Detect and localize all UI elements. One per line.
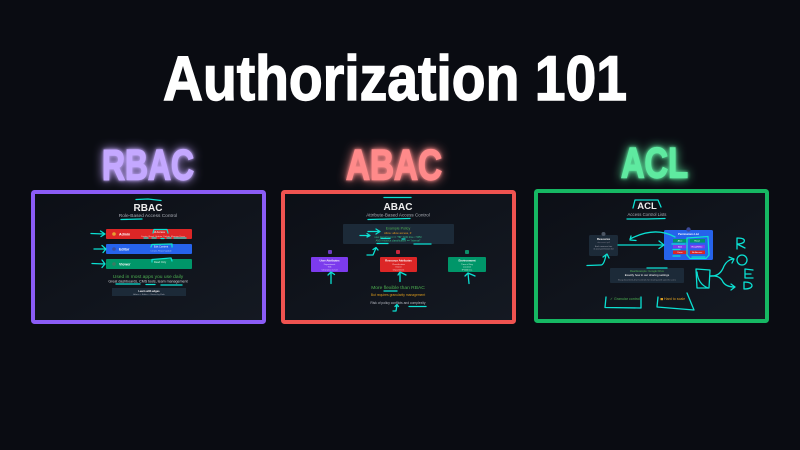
box: resource attributes: Owner	[395, 266, 402, 268]
box: resource attributes: Resource Attributes	[385, 258, 412, 262]
text: examples: Great dashboards, CMS tools, team management	[108, 280, 188, 284]
example policy box: user.department == "HR" AND time < 5PM	[374, 236, 422, 239]
attribute dots	[328, 250, 469, 254]
role bar: admin: Admin	[119, 232, 130, 236]
panel title: RBAC: RBAC	[134, 203, 162, 214]
example policy box: Example Policy	[386, 226, 410, 230]
box: user attributes	[311, 257, 348, 272]
box: user attributes: Clearance Level	[322, 268, 338, 271]
box: user attributes: User Attributes	[319, 258, 340, 262]
resource box: its own permission list	[593, 248, 614, 250]
box: resource attributes: Classification	[392, 263, 406, 266]
resource box	[589, 232, 618, 256]
pro: granular control: ✓ Granular control	[610, 297, 640, 301]
box: environment: Environment	[458, 258, 476, 262]
heading: ACL: ACL	[621, 140, 688, 188]
panel title: ACL: ACL	[637, 201, 657, 212]
example policy box	[343, 224, 454, 244]
text: risk: Risk of policy conflicts and complexity	[370, 301, 426, 305]
permissions list box: Read/Write	[692, 246, 703, 248]
panel: RBAC	[33, 192, 264, 322]
text: usage: Used in most apps you use daily	[113, 274, 184, 280]
box: resource attributes: Department	[393, 268, 405, 271]
box: environment: Time of Day	[461, 264, 474, 266]
example policy box: AND resource.classification == "internal"	[376, 240, 421, 242]
panel subtitle: Access Control Lists	[628, 212, 666, 217]
example policy box: Allow: allow access, if:	[384, 231, 412, 235]
permissions list box: Dave	[677, 252, 683, 254]
hand-drawn annotations	[328, 198, 475, 311]
resource box: Each resource has	[595, 245, 612, 248]
role bar: admin	[106, 229, 192, 239]
box: environment	[448, 257, 486, 272]
heading: RBAC: RBAC	[102, 142, 194, 190]
role bar: editor: Editor	[119, 248, 130, 252]
role bar: editor	[106, 244, 192, 254]
text: flexibility: More flexible than RBAC	[371, 285, 425, 291]
permissions list box: Alice	[678, 240, 683, 243]
box: user attributes: Department	[324, 263, 336, 266]
permissions list box	[664, 227, 713, 260]
callout: Admin > Editor > Viewer by Role	[133, 293, 166, 296]
hand-drawn letters: R O E D	[737, 238, 753, 289]
role bar: admin: All Access	[153, 230, 166, 234]
example callout box: Easy document-level controls for sharing with specific users	[618, 278, 677, 282]
title: Authorization 101	[163, 44, 627, 114]
role bar: viewer: Read Only	[154, 260, 167, 264]
role bar: viewer	[106, 259, 192, 269]
role bar: editor: Create, Read, Update	[150, 250, 172, 252]
panel: ACL	[536, 191, 767, 321]
panel subtitle: Role-Based Access Control	[119, 213, 177, 219]
text: granularity: But requires granularity management	[371, 293, 425, 297]
resource box: document.pdf	[597, 241, 610, 244]
permissions list box: Read	[694, 241, 700, 243]
con: hard to scale: Hard to scale	[664, 297, 685, 301]
hand-drawn annotations	[91, 199, 186, 285]
box: user attributes: Title	[327, 266, 332, 268]
permissions list box: Bob	[678, 246, 683, 248]
example callout box: Exactly how in our sharing settings	[625, 273, 670, 277]
example callout box	[610, 268, 684, 283]
panel title: ABAC: ABAC	[384, 202, 412, 213]
permissions list box: Permissions List	[678, 232, 699, 236]
panel: ABAC	[283, 192, 514, 322]
box: environment: IP Address	[462, 268, 473, 271]
heading: ABAC: ABAC	[346, 142, 442, 190]
box: resource attributes	[380, 257, 417, 272]
role bar: admin: Create, Read, Update, Delete, Manage Users	[141, 235, 186, 238]
role bar: editor: Edit Content	[154, 244, 168, 248]
resource box: Resource	[597, 237, 610, 241]
role bar: viewer: Viewer	[119, 262, 131, 266]
panel subtitle: Attribute-Based Access Control	[366, 212, 430, 218]
hand-drawn annotations	[587, 200, 753, 310]
box: environment: Location	[463, 266, 472, 268]
permissions list box: No Access	[692, 251, 703, 254]
callout: Learn with edges	[138, 289, 160, 293]
example callout box: Real Example: Google Drive	[630, 269, 664, 273]
callout	[112, 288, 186, 296]
